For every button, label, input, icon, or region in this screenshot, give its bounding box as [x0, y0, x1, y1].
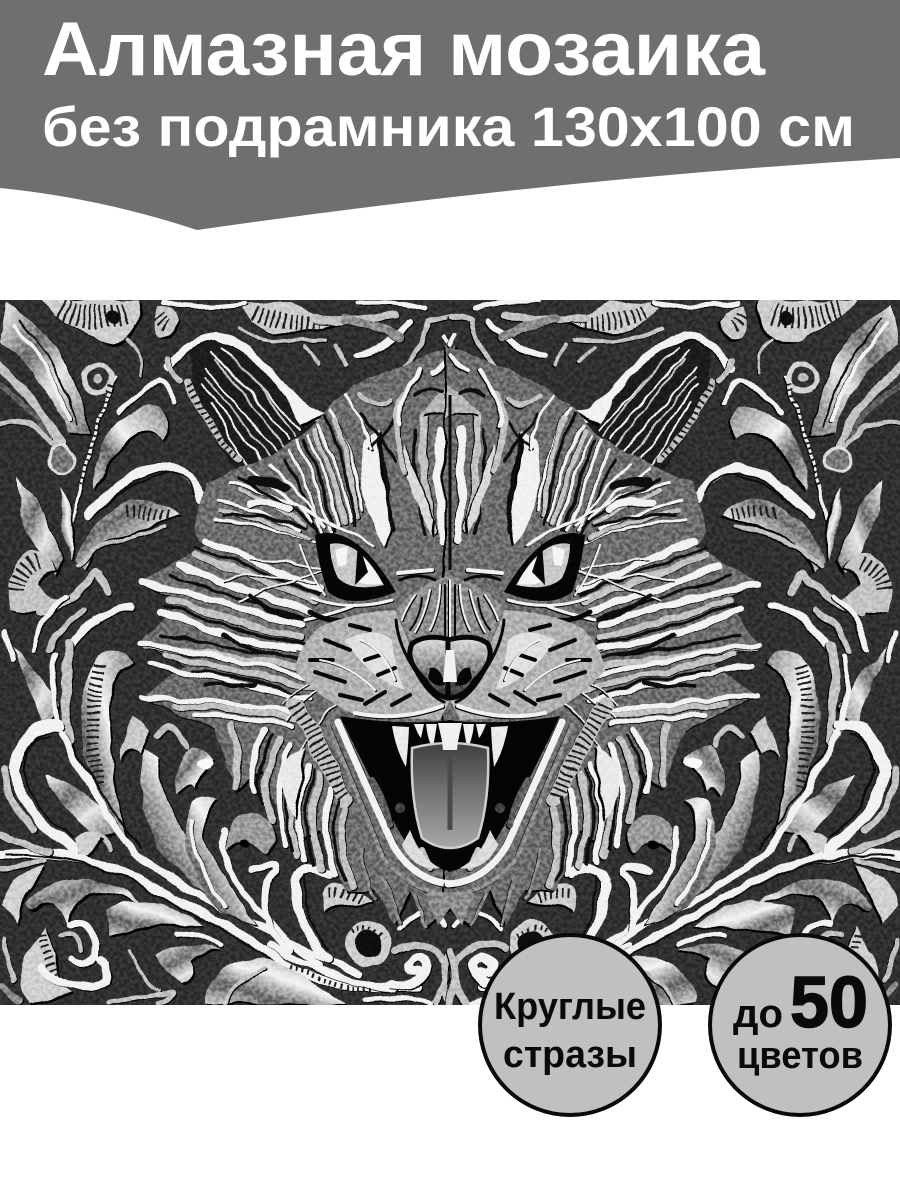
- header banner: [0, 0, 900, 230]
- title: Алмазная мозаика: [42, 7, 766, 92]
- right face: [448, 533, 605, 895]
- badge: up to 50 colours: цветов: [737, 1035, 863, 1077]
- badge: up to 50 colours: до: [733, 992, 783, 1036]
- right ornaments and fur: [445, 300, 900, 1005]
- tongue: [412, 743, 488, 848]
- subtitle: без подрамника 130х100 см: [42, 95, 855, 158]
- picture background: [0, 300, 900, 1005]
- badge: round rhinestones: Круглые: [494, 986, 646, 1028]
- left face: [295, 533, 452, 895]
- left ornaments and fur: [0, 300, 455, 1005]
- central forehead stem: [448, 395, 452, 570]
- badge: round rhinestones: [480, 935, 660, 1115]
- badge: up to 50 colours: 50: [790, 963, 868, 1043]
- picture: silver cat relief: [0, 300, 900, 1005]
- chin centre: [425, 893, 475, 925]
- centre teeth: [442, 739, 458, 750]
- nose highlight: [443, 650, 457, 682]
- metallic texture overlay: [0, 300, 900, 1005]
- badge: round rhinestones: стразы: [503, 1034, 637, 1076]
- badge: up to 50 colours: [710, 935, 890, 1115]
- tongue centre groove: [448, 755, 452, 830]
